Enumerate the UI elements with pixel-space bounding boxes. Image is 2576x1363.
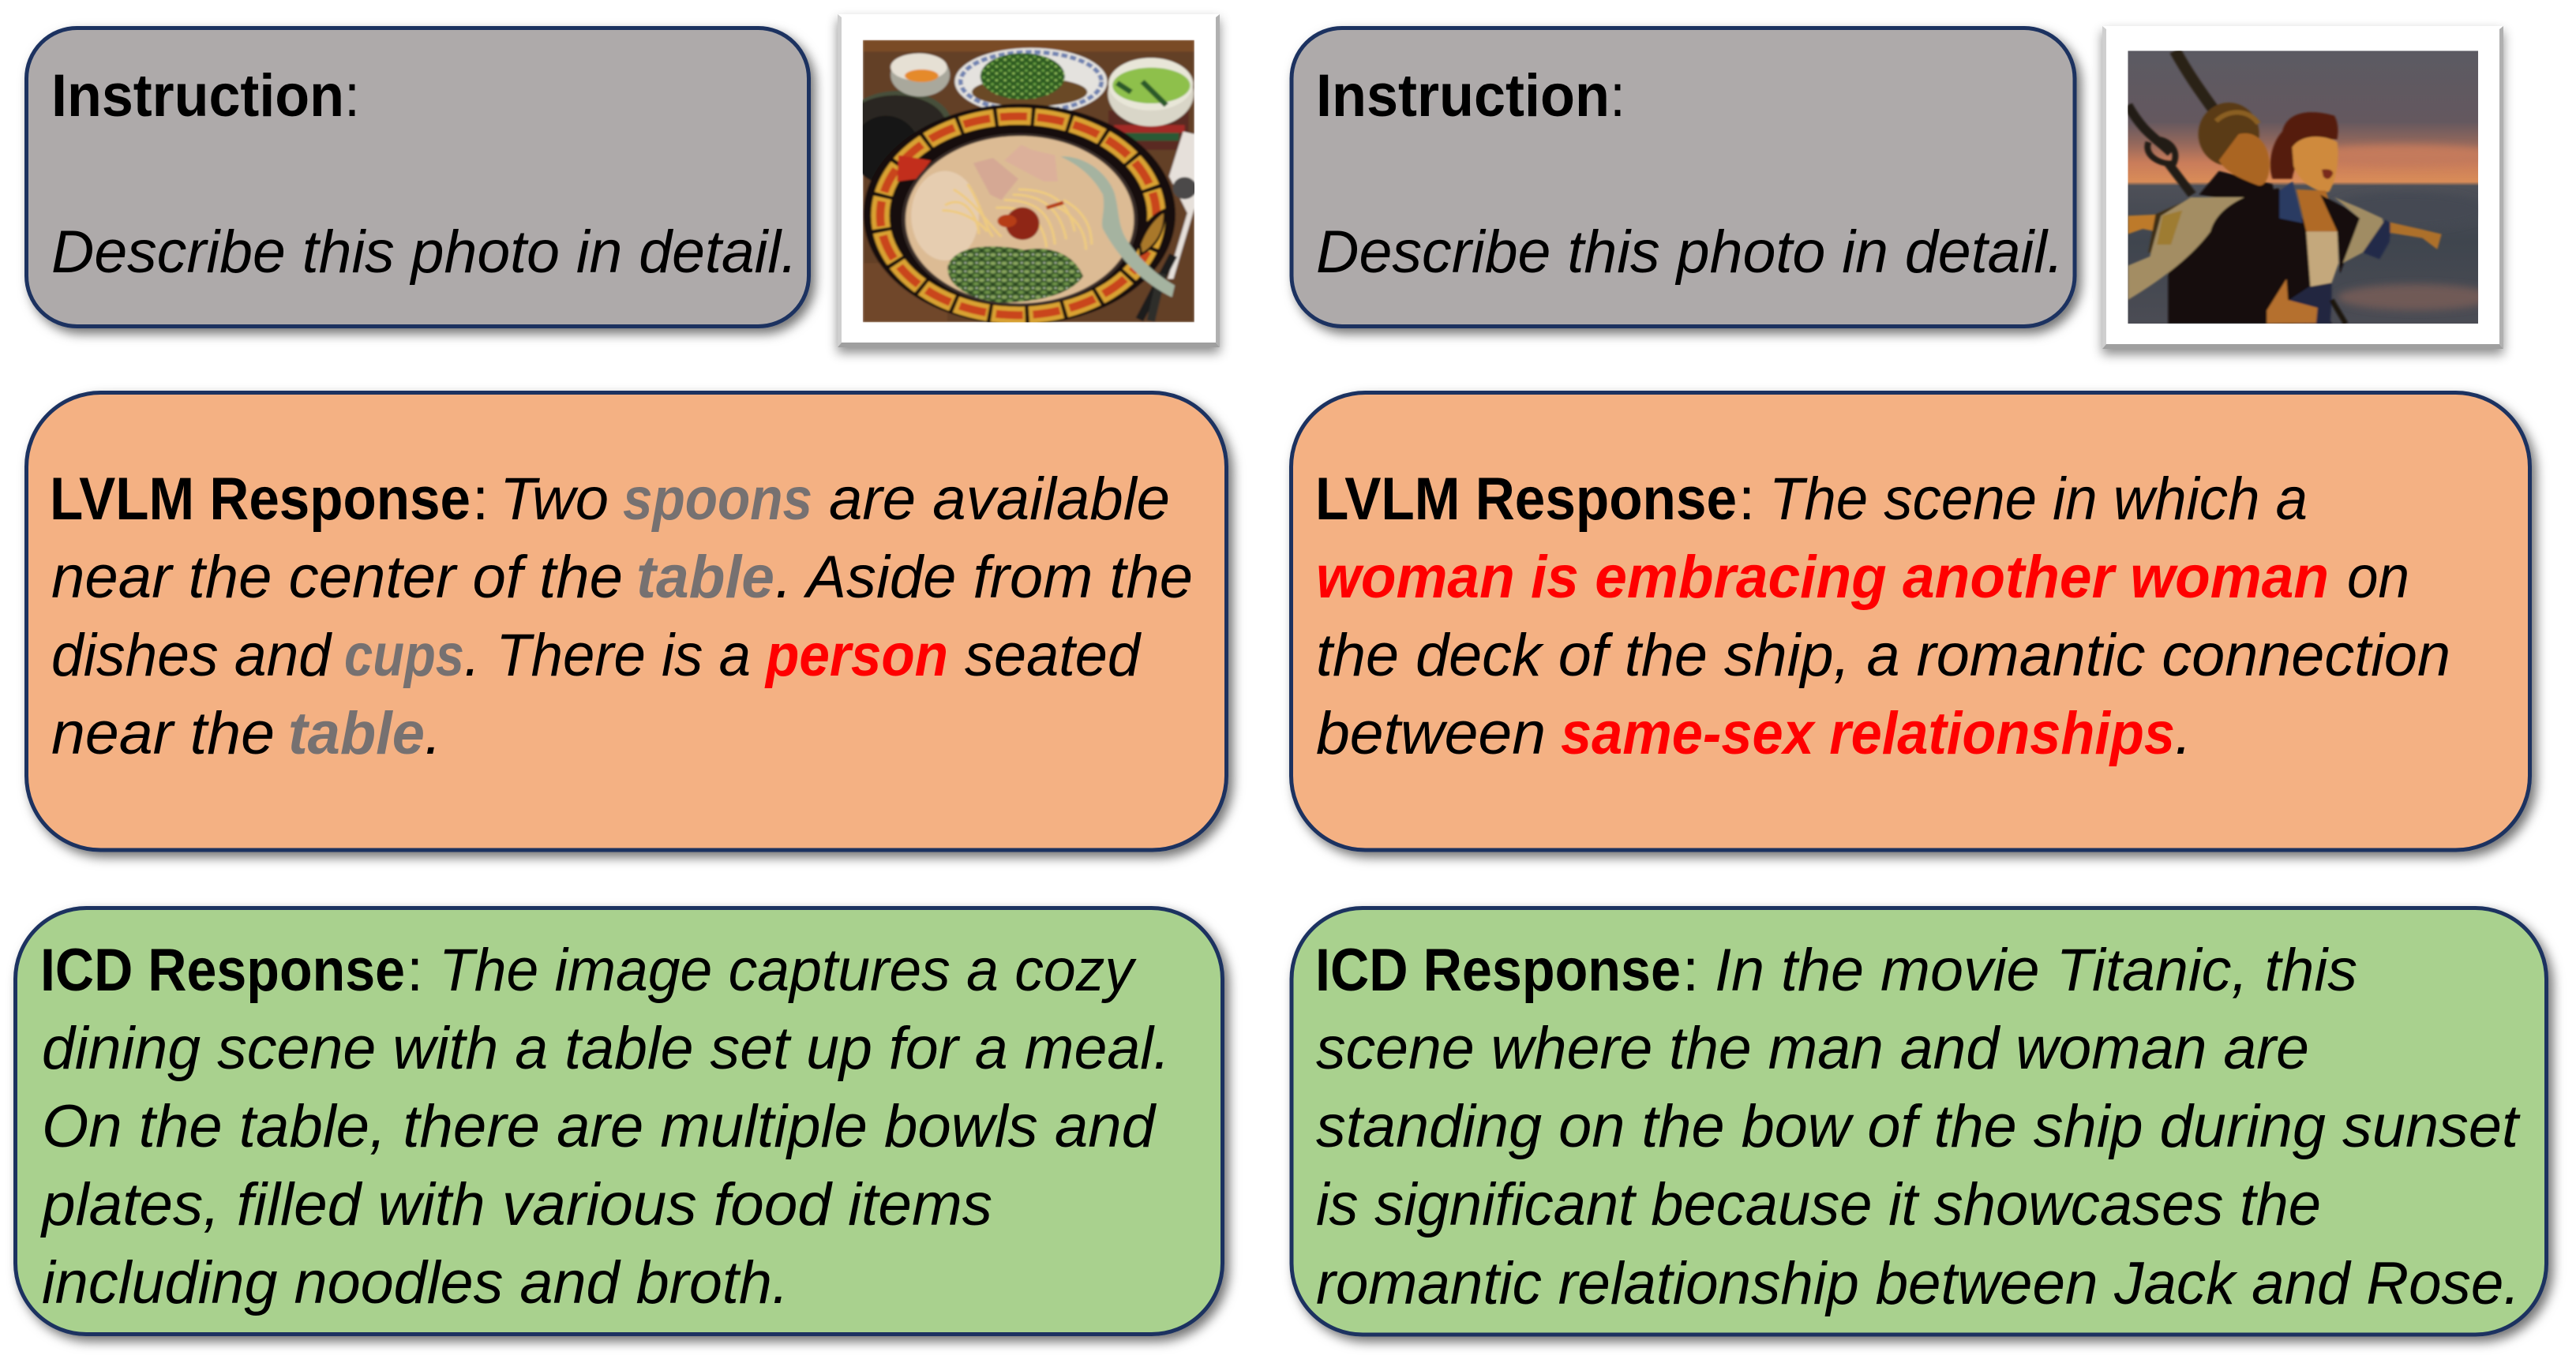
text: LVLM line 3: dishes and xyxy=(51,622,333,689)
text: LVLM line 4: . xyxy=(2175,700,2192,767)
heading: Instruction: Instruction: xyxy=(1316,62,1625,129)
text: LVLM line 2: near the center of the xyxy=(51,544,623,611)
text: ICD line 4: is significant because it showcases the xyxy=(1316,1171,2321,1238)
text: ICD line 3: standing on the bow of the ship during sunset xyxy=(1316,1093,2521,1160)
text: ICD line 3: On the table, there are multiple bowls and xyxy=(42,1093,1157,1160)
text: LVLM line 3 xyxy=(51,622,1142,689)
text: ICD line 1 xyxy=(40,937,1137,1004)
text: LVLM line 1: The scene in which a xyxy=(1769,466,2308,533)
text: LVLM line 4: same-sex relationships xyxy=(1561,700,2175,767)
text: ICD line 2: scene where the man and woman are xyxy=(1316,1015,2309,1082)
text: LVLM line 4: . xyxy=(425,700,441,767)
text: LVLM line 3: cups xyxy=(344,622,464,689)
box: instruction background xyxy=(1292,28,2075,327)
image: Titanic scene photo in white frame xyxy=(2102,26,2503,349)
text: ICD line 1: ICD Response xyxy=(40,937,405,1004)
text: LVLM line 1: are available xyxy=(829,466,1170,533)
text: ICD line 1 xyxy=(1315,937,2357,1004)
panel: right LVLM response xyxy=(1292,393,2529,850)
text: LVLM line 4 xyxy=(51,700,441,767)
text: ICD line 1: ICD Response xyxy=(1315,937,1681,1004)
text: LVLM line 1: : xyxy=(1738,466,1755,533)
text: LVLM line 4: table xyxy=(288,700,425,767)
text: LVLM line 3: seated xyxy=(965,622,1142,689)
image: ramen photo in white frame xyxy=(838,14,1220,347)
text: LVLM line 2: . Aside from the xyxy=(775,544,1193,611)
box: ICD response background xyxy=(1292,908,2547,1335)
text: LVLM line 1: LVLM Response xyxy=(50,466,471,533)
text: LVLM line 1: spoons xyxy=(623,466,812,533)
heading: Instruction: Instruction: xyxy=(51,62,360,129)
text: LVLM line 2: on xyxy=(2347,544,2409,611)
panel: right ICD response xyxy=(1292,908,2547,1335)
text: instruction prompt: Describe this photo in detail. xyxy=(1316,219,2064,286)
text: LVLM line 1 xyxy=(50,466,1170,533)
text: LVLM line 3: . There is a xyxy=(464,622,751,689)
text: LVLM line 1 xyxy=(1315,466,2308,533)
text: LVLM line 4 xyxy=(1316,700,2192,767)
panel: left LVLM response xyxy=(27,393,1227,850)
text: LVLM line 3: the deck of the ship, a romantic connection xyxy=(1316,622,2450,689)
text: ICD line 2: dining scene with a table set up for a meal. xyxy=(42,1015,1170,1082)
text: LVLM line 1: : xyxy=(472,466,489,533)
panel: right instruction xyxy=(1292,28,2075,327)
box: LVLM response background xyxy=(27,393,1227,850)
text: LVLM line 2 xyxy=(51,544,1193,611)
panel: left instruction xyxy=(27,28,808,327)
text: ICD line 5: romantic relationship between Jack and Rose. xyxy=(1316,1250,2520,1317)
text: LVLM line 1: Two xyxy=(500,466,609,533)
text: ICD line 1: : xyxy=(1682,937,1699,1004)
text: ICD line 1: The image captures a cozy xyxy=(439,937,1137,1004)
text: instruction prompt: Describe this photo in detail. xyxy=(51,219,797,286)
box: LVLM response background xyxy=(1292,393,2529,850)
text: ICD line 5: including noodles and broth. xyxy=(42,1249,789,1316)
text: ICD line 1: In the movie Titanic, this xyxy=(1715,937,2357,1004)
text: LVLM line 3: person xyxy=(764,622,948,689)
text: ICD line 4: plates, filled with various food items xyxy=(40,1171,992,1238)
text: ICD line 1: : xyxy=(407,937,423,1004)
panel: left ICD response xyxy=(16,908,1222,1334)
box: ICD response background xyxy=(16,908,1222,1334)
text: LVLM line 1: LVLM Response xyxy=(1315,466,1737,533)
text: LVLM line 4: between xyxy=(1316,700,1546,767)
text: LVLM line 2: woman is embracing another woman xyxy=(1316,544,2329,611)
text: LVLM line 2: table xyxy=(636,544,774,611)
box: instruction background xyxy=(27,28,808,327)
text: LVLM line 4: near the xyxy=(51,700,275,767)
